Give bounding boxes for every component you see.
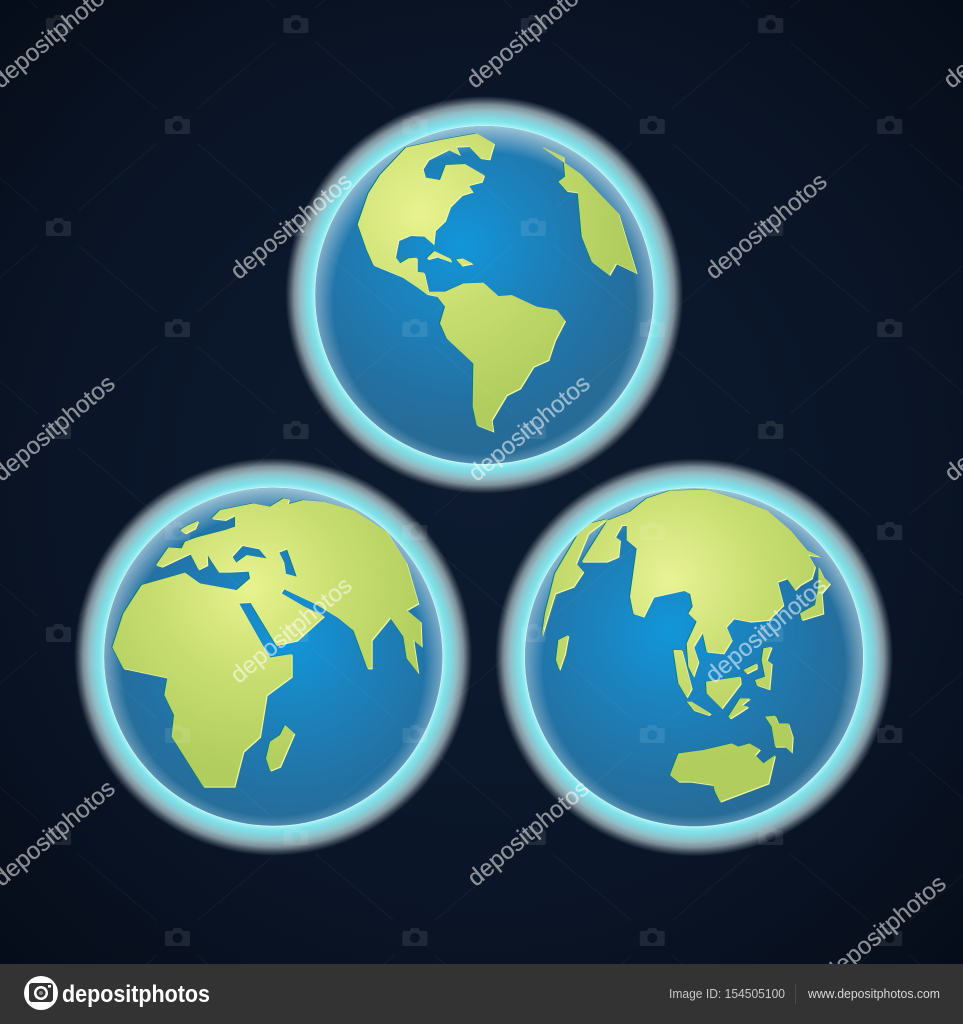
globe: Asia and Australia bbox=[495, 458, 893, 856]
logo wordmark: depositphotos bbox=[62, 981, 210, 1008]
image id: Image ID: 154505100 bbox=[669, 987, 785, 1001]
globe: Europe and Africa bbox=[74, 458, 472, 856]
globe: Americas bbox=[285, 96, 683, 494]
land: Asia, Indonesia, Australia bbox=[541, 489, 831, 803]
repeated diagonal watermarks: depositphotos bbox=[462, 775, 594, 892]
website url: www.depositphotos.com bbox=[807, 987, 940, 1001]
repeated diagonal watermarks: depositphotos bbox=[225, 572, 357, 689]
footer bar bbox=[0, 964, 963, 1024]
repeated diagonal watermarks: depositphotos bbox=[700, 168, 832, 285]
icon: camera logo bbox=[24, 976, 58, 1010]
repeated diagonal watermarks: depositphotos bbox=[700, 572, 832, 689]
repeated diagonal watermarks: depositphotos bbox=[225, 168, 357, 285]
repeated diagonal watermarks: depositphotos bbox=[819, 870, 951, 987]
land: North and South America, Africa edge bbox=[357, 133, 638, 433]
land: Africa, Europe, western Asia bbox=[111, 498, 423, 788]
repeated diagonal watermarks: depositphotos bbox=[463, 370, 595, 487]
